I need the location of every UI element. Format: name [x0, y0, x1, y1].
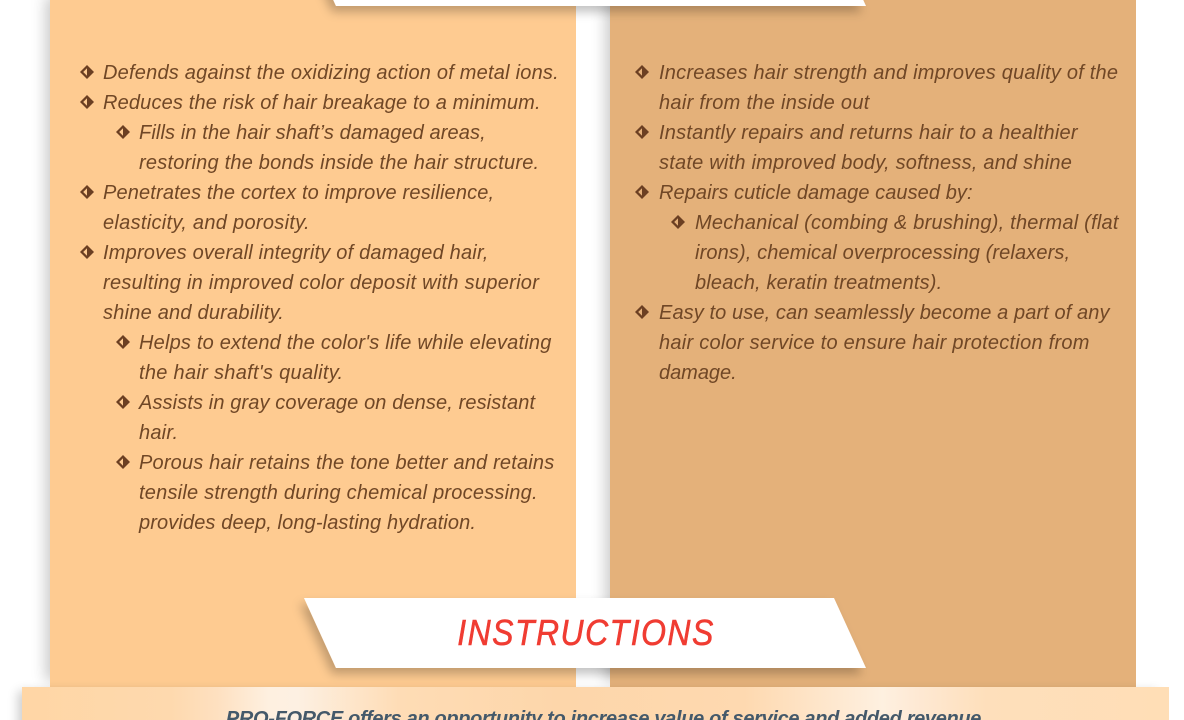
list: right column bullets: state with improved body, softness, and shine	[659, 152, 1072, 174]
list: left column bullets: Defends against the oxidizing action of metal ions.	[103, 62, 559, 84]
list: left column bullets: elasticity, and porosity.	[103, 212, 310, 234]
list: left column bullets: resulting in improved color deposit with superior	[103, 272, 539, 294]
list: left column bullets: Porous hair retains the tone better and retains	[139, 452, 554, 474]
list: right column bullets: Instantly repairs and returns hair to a healthier	[659, 122, 1078, 144]
list: left column bullets: the hair shaft's quality.	[139, 362, 343, 384]
list: left column bullets: restoring the bonds inside the hair structure.	[139, 152, 539, 174]
list: left column bullets: hair.	[139, 422, 178, 444]
list: left column bullets: provides deep, long-lasting hydration.	[139, 512, 476, 534]
list: right column bullets: damage.	[659, 362, 737, 384]
list: left column bullets: tensile strength during chemical processing.	[139, 482, 538, 504]
list: left column bullets: Improves overall integrity of damaged hair,	[103, 242, 488, 264]
list: right column bullets: bleach, keratin treatments).	[695, 272, 942, 294]
list: left column bullets: Reduces the risk of hair breakage to a minimum.	[103, 92, 541, 114]
panel: right column	[610, 0, 1136, 687]
list: right column bullets: irons), chemical overprocessing (relaxers,	[695, 242, 1070, 264]
list: left column bullets: shine and durability.	[103, 302, 284, 324]
list: left column bullets: Assists in gray coverage on dense, resistant	[139, 392, 535, 414]
list: left column bullets: Penetrates the cortex to improve resilience,	[103, 182, 494, 204]
panel: left column	[50, 0, 576, 687]
list: right column bullets: Repairs cuticle damage caused by:	[659, 182, 973, 204]
list: right column bullets: hair from the inside out	[659, 92, 870, 114]
list: right column bullets: Increases hair strength and improves quality of the	[659, 62, 1118, 84]
banner: instructions heading: INSTRUCTIONS	[457, 612, 715, 653]
list: right column bullets: Mechanical (combing & brushing), thermal (flat	[695, 212, 1119, 234]
panel: instructions intro band	[22, 687, 1169, 720]
list: left column bullets: Fills in the hair shaft’s damaged areas,	[139, 122, 486, 144]
list: left column bullets: Helps to extend the color's life while elevating	[139, 332, 552, 354]
list: right column bullets: hair color service to ensure hair protection from	[659, 332, 1090, 354]
list: right column bullets: Easy to use, can seamlessly become a part of any	[659, 302, 1110, 324]
